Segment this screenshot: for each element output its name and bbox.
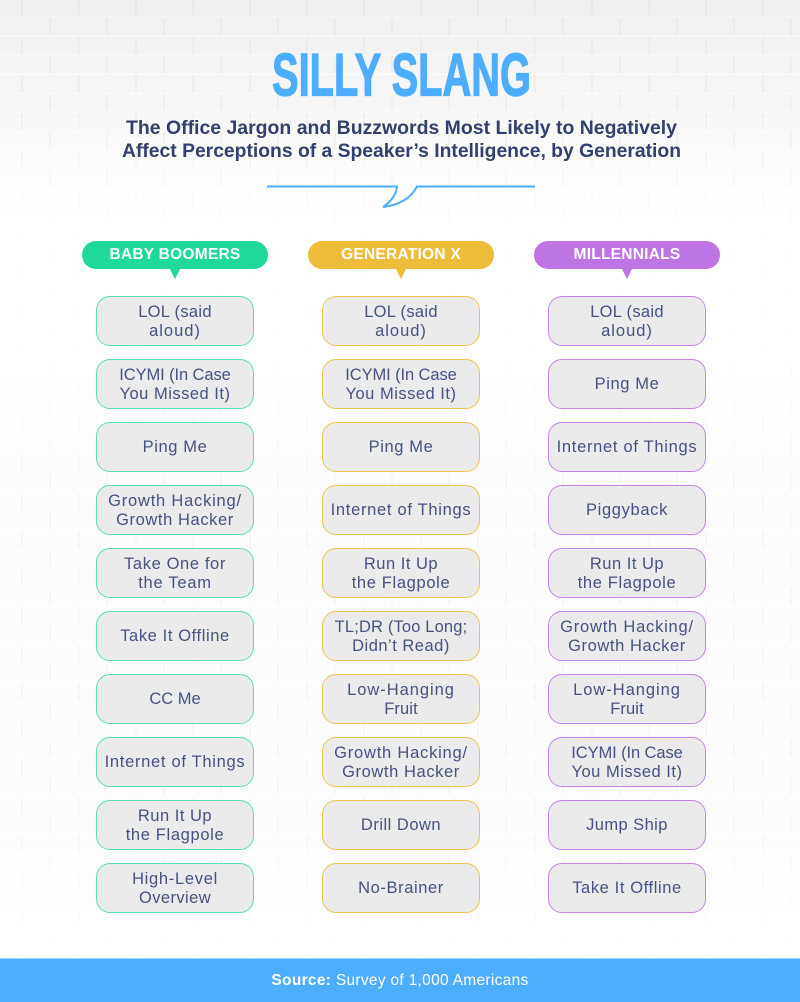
subtitle [122,117,681,162]
column: baby boomers: Run It Up the Flagpole [126,806,224,844]
title: SILLY SLANG [272,42,531,108]
header: baby boomers: BABY BOOMERS [109,246,241,263]
column: generation x: No-Brainer [358,879,444,897]
column: baby boomers [82,241,268,913]
column: millennials: Low-Hanging Fruit [573,680,681,718]
column: millennials: Ping Me [595,375,659,393]
column: millennials [534,241,720,913]
column: millennials: Take It Offline [572,879,682,897]
footer: source [0,958,800,1002]
subtitle: Affect Perceptions of a Speaker’s Intelligence, by Generation [122,140,681,162]
header: generation x [308,241,494,279]
column: baby boomers: Internet of Things [105,753,245,771]
column: millennials: LOL (said aloud) [590,302,664,340]
column: baby boomers: Growth Hacking/ Growth Hacker [108,492,242,528]
column: baby boomers: High-Level Overview [132,870,218,906]
header: generation x: GENERATION X [341,246,461,263]
footer: source: Source: Survey of 1,000 Americans [271,972,529,989]
column: generation x: Growth Hacking/ Growth Hacker [334,744,468,780]
column: millennials: ICYMI (In Case You Missed It) [571,744,683,780]
column: generation x [308,241,494,913]
column: generation x: TL;DR (Too Long; Didn’t Read) [335,618,467,654]
column: generation x: LOL (said aloud) [364,302,438,340]
header: millennials [534,241,720,279]
column: generation x: Run It Up the Flagpole [352,554,450,592]
subtitle: The Office Jargon and Buzzwords Most Likely to Negatively [126,117,677,139]
header: baby boomers [82,241,268,279]
column: generation x: Ping Me [369,438,433,456]
column: millennials: Internet of Things [557,438,697,456]
column: generation x: Low-Hanging Fruit [347,680,455,718]
column: generation x: Drill Down [361,816,441,834]
column: baby boomers: CC Me [149,690,201,708]
column: millennials: Run It Up the Flagpole [578,554,676,592]
column: baby boomers: LOL (said aloud) [138,302,212,340]
column: baby boomers: Ping Me [143,438,207,456]
column: millennials: Piggyback [586,501,668,519]
column: millennials: Growth Hacking/ Growth Hacker [560,618,694,654]
column: generation x: ICYMI (In Case You Missed It) [345,366,457,402]
column: generation x: Internet of Things [331,501,471,519]
column: baby boomers: Take It Offline [120,627,230,645]
column: baby boomers: Take One for the Team [124,554,226,592]
speech bubble divider [267,186,535,208]
column: baby boomers: ICYMI (In Case You Missed It) [119,366,231,402]
column: millennials: Jump Ship [586,816,668,834]
header: millennials: MILLENNIALS [574,246,680,263]
